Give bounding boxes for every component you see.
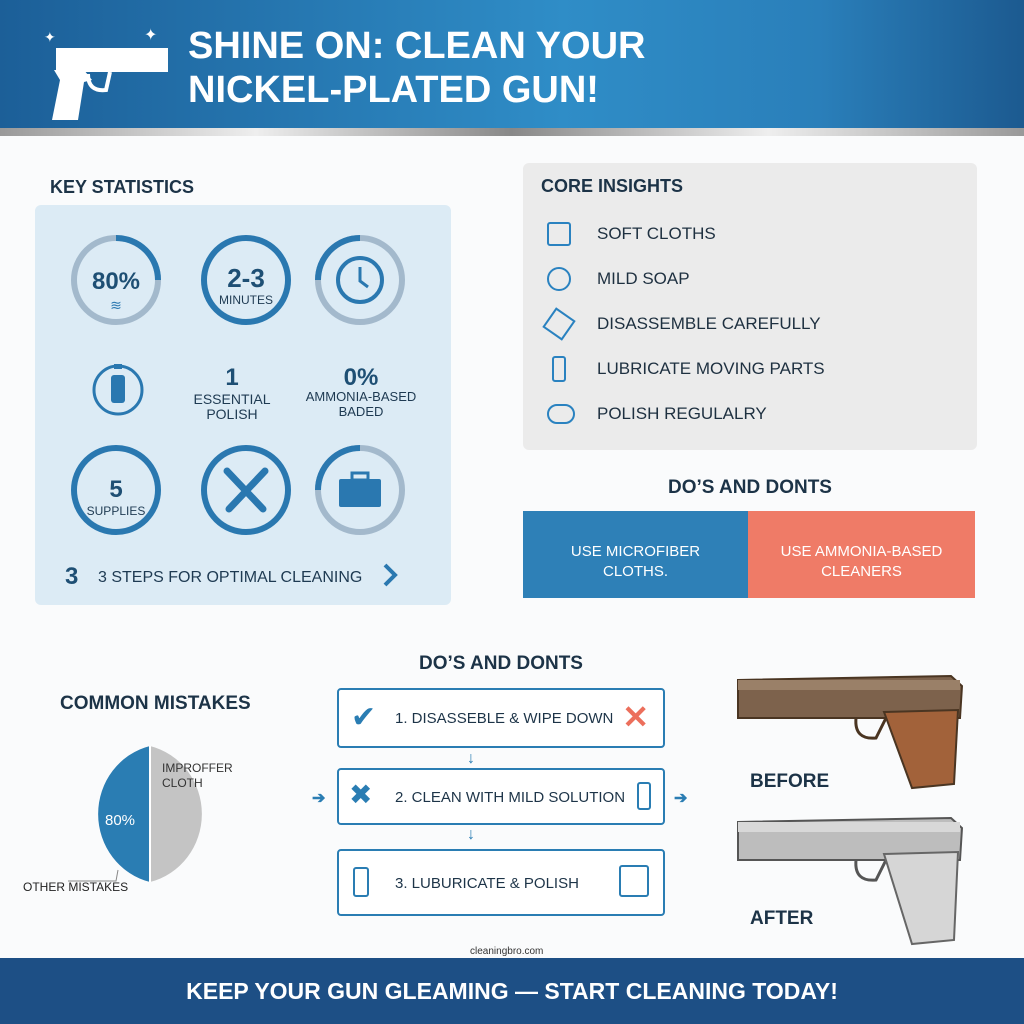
stat: tools [204, 448, 288, 532]
arrows: ➔ [674, 790, 687, 807]
arrows [312, 750, 687, 843]
icon: pistol: ✦ [144, 27, 157, 44]
stat: 1 essential polish: 1 [225, 364, 239, 391]
arrows: ↓ [467, 750, 475, 767]
pie chart [23, 746, 233, 894]
steps line: 3 STEPS FOR OPTIMAL CLEANING [98, 569, 362, 586]
after gun [737, 817, 963, 946]
dont box [748, 511, 975, 598]
step 3 [337, 849, 665, 916]
icon: pistol: ✦ [44, 29, 56, 45]
header banner [0, 0, 1024, 130]
footer banner: KEEP YOUR GUN GLEAMING — START CLEANING TODAY! [186, 978, 838, 1004]
title: NICKEL-PLATED GUN! [188, 69, 599, 111]
stat: 1 essential polish: ESSENTIAL [193, 391, 271, 407]
stat: 80%: 80% [92, 268, 140, 295]
arrows: ➔ [312, 790, 325, 807]
insights list: POLISH REGULALRY [597, 404, 767, 422]
pie chart: 80% [105, 812, 135, 829]
panel: core insights [523, 163, 977, 450]
step 1: ✕ [622, 699, 649, 735]
pie chart: CLOTH [162, 776, 203, 790]
label after: AFTER [750, 908, 813, 929]
panel: key statistics [35, 205, 451, 605]
footer banner [0, 958, 1024, 1024]
insights list: MILD SOAP [597, 268, 690, 288]
stat: bottle timer [94, 364, 142, 414]
stat: 5 supplies: SUPPLIES [87, 504, 145, 518]
dont box: CLEANERS [821, 563, 902, 580]
stat: 80% [74, 238, 158, 322]
stat: 5 supplies: 5 [109, 476, 123, 503]
insights list: DISASSEMBLE CAREFULLY [597, 314, 821, 332]
step 2: ✖ [349, 779, 372, 810]
arrows: ↓ [467, 826, 475, 843]
insights list [542, 222, 825, 424]
stat: 80%: ≋ [110, 297, 122, 313]
do box [523, 511, 748, 598]
label before: BEFORE [750, 771, 829, 792]
do box: USE MICROFIBER [571, 543, 700, 560]
title: SHINE ON: CLEAN YOUR [188, 25, 645, 67]
step 1: ✔ [351, 701, 376, 734]
stat: 2-3 minutes [204, 238, 288, 322]
insights list: LUBRICATE MOVING PARTS [597, 358, 825, 378]
step 2 [337, 768, 665, 825]
stat: 2-3 minutes: 2-3 [227, 263, 265, 293]
stat: 0% ammonia [306, 364, 416, 419]
heading: common mistakes: COMMON MISTAKES [60, 693, 251, 714]
stat: 0% ammonia: AMMONIA-BASED [306, 389, 416, 404]
stat: 2-3 minutes: MINUTES [219, 293, 273, 307]
pie chart: IMPROFFER [162, 761, 233, 775]
step 3: 3. LUBURICATE & POLISH [395, 875, 579, 892]
insights list: SOFT CLOTHS [597, 224, 716, 242]
do box: CLOTHS. [603, 563, 668, 580]
title [188, 25, 645, 111]
icon: pistol [44, 27, 168, 120]
dont box: USE AMMONIA-BASED [781, 543, 942, 560]
steps line: 3 [65, 563, 78, 590]
heading: do's and donts: DO’S AND DONTS [668, 477, 832, 498]
steps line [65, 563, 395, 590]
stat: 0% ammonia: BADED [339, 404, 383, 419]
source: cleaningbro.com [470, 946, 543, 957]
before gun [737, 675, 963, 790]
step 1 [337, 688, 665, 748]
stat: 0% ammonia: 0% [344, 364, 378, 391]
heading: flow do's and donts: DO’S AND DONTS [419, 653, 583, 674]
heading: core insights: CORE INSIGHTS [541, 176, 683, 196]
step 1: 1. DISASSEBLE & WIPE DOWN [395, 710, 613, 727]
stat: 1 essential polish: POLISH [206, 406, 258, 422]
stat: clock [318, 238, 402, 322]
step 2: 2. CLEAN WITH MILD SOLUTION [395, 789, 625, 806]
pie chart: OTHER MISTAKES [23, 880, 128, 894]
stat: 1 essential polish [193, 364, 271, 422]
heading: key statistics: KEY STATISTICS [50, 177, 194, 197]
stat: 5 supplies [74, 448, 158, 532]
stat: toolbox [318, 448, 402, 532]
